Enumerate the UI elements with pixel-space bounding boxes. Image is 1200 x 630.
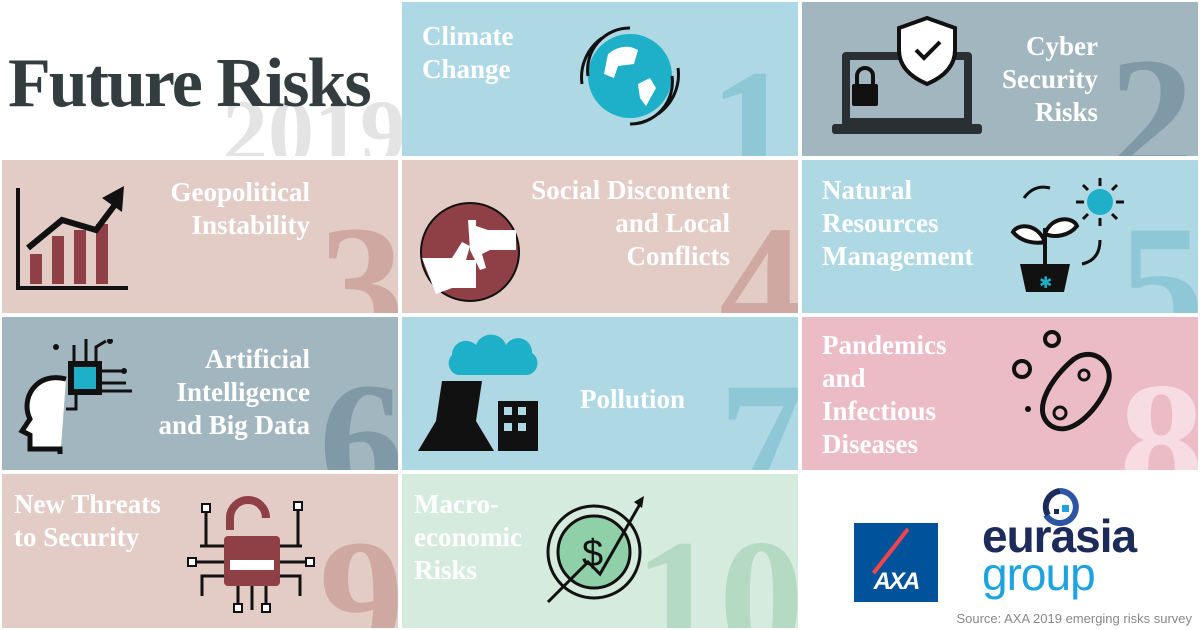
panel: geopolitical instability: Instability — [191, 210, 310, 240]
panel: climate change — [402, 2, 798, 156]
panel: natural resources: Resources — [822, 208, 938, 238]
logo: eurasia group: group — [982, 548, 1095, 600]
panel: social discontent: and Local — [615, 208, 730, 238]
icon: laptop with lock — [832, 16, 982, 134]
icon: dollar coin — [546, 496, 644, 603]
panel: natural resources: Natural — [822, 175, 912, 205]
icon: rising chart — [16, 186, 128, 290]
logo: eurasia group — [982, 488, 1138, 600]
source note: Source: AXA 2019 emerging risks survey — [956, 611, 1192, 626]
icon: padlock circuit — [187, 496, 315, 613]
panel: social discontent: Conflicts — [626, 241, 730, 271]
panel: cyber security: Risks — [1035, 97, 1098, 127]
title: Future Risks — [8, 45, 370, 122]
panel: macroeconomic: Risks — [414, 555, 477, 585]
panel: climate change: Climate — [422, 21, 513, 51]
panel: macroeconomic: economic — [414, 522, 522, 552]
panel: cyber security: Cyber — [1026, 31, 1098, 61]
logo: AXA: AXA — [874, 568, 918, 595]
panel: social discontent — [402, 160, 798, 313]
logo: eurasia group: eurasia — [982, 510, 1136, 562]
panel: new threats: to Security — [14, 522, 139, 552]
panel: pollution: Pollution — [580, 384, 685, 414]
panel: pandemics: and — [822, 363, 866, 393]
panel: AI and big data — [2, 317, 398, 470]
panel: AI and big data: Artificial — [205, 344, 310, 374]
icon: plant and sun: ✱ — [1039, 275, 1052, 292]
panel: AI and big data: Intelligence — [177, 377, 310, 407]
logo: AXA — [854, 523, 938, 602]
panel: pollution — [402, 317, 798, 470]
panel: macroeconomic: Macro- — [414, 489, 499, 519]
icon: plant and sun — [1010, 178, 1124, 292]
icon: globe — [580, 26, 680, 126]
panel: cyber security — [802, 2, 1198, 156]
panel: new threats: New Threats — [14, 489, 161, 519]
icon: dollar coin: $ — [582, 533, 603, 575]
icon: thumbs circle — [420, 202, 520, 302]
panel: geopolitical instability — [2, 160, 398, 313]
panel: AI and big data: and Big Data — [158, 410, 310, 440]
icon: head with chip — [18, 339, 132, 454]
panel: climate change: Change — [422, 54, 511, 84]
panel: pandemics — [802, 317, 1198, 470]
panel: macroeconomic — [402, 474, 798, 628]
panel: natural resources: Management — [822, 241, 973, 271]
panel: pandemics: Pandemics — [822, 330, 946, 360]
panel: social discontent: Social Discontent — [531, 175, 730, 205]
panel: pandemics: Diseases — [822, 429, 918, 459]
panel: geopolitical instability: Geopolitical — [171, 177, 310, 207]
icon: bacteria — [1012, 330, 1112, 432]
panel: new threats — [2, 474, 398, 628]
panel: cyber security: Security — [1002, 64, 1098, 94]
panel: natural resources — [802, 160, 1198, 313]
icon: factory smoke — [418, 334, 538, 451]
panel: pandemics: Infectious — [822, 396, 936, 426]
